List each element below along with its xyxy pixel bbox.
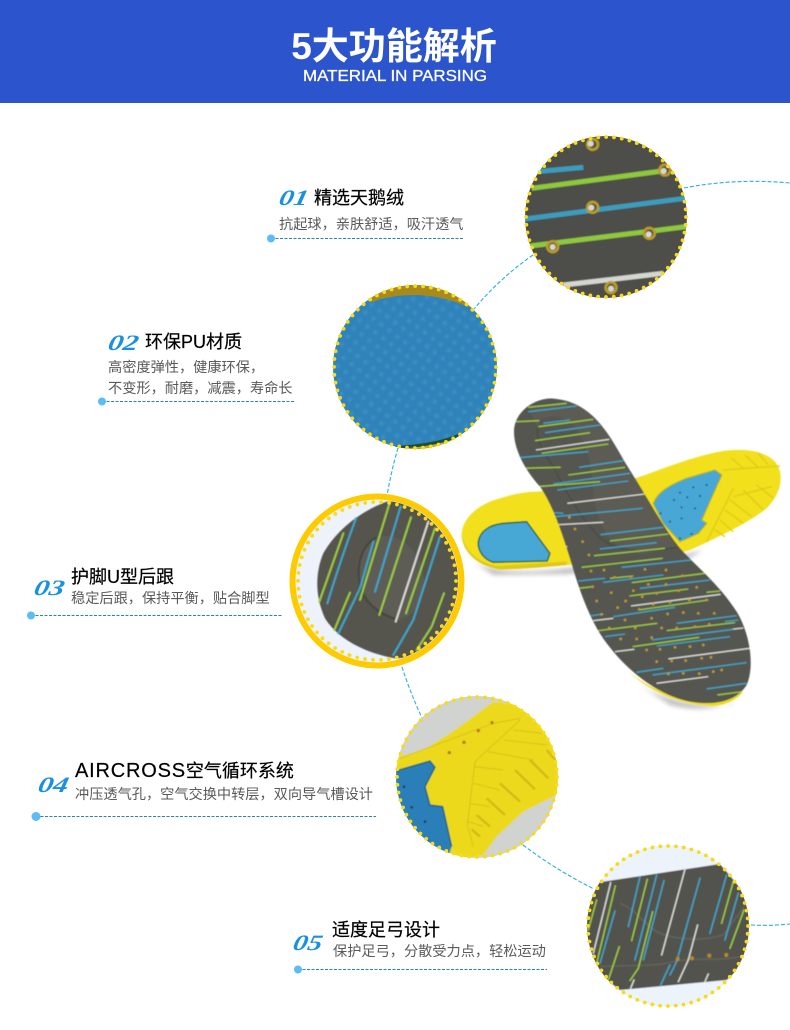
- shadows: [473, 550, 743, 709]
- circle 04: air channel close-up: [395, 695, 559, 859]
- feature 05 text: [291, 920, 547, 974]
- feature 02 text: [98, 330, 295, 406]
- circle 03: U-shaped heel close-up: [292, 496, 467, 666]
- divider 02: [98, 398, 295, 406]
- heading 04: AIRCROSS空气循环系统: [75, 760, 294, 782]
- number 01: 01: [277, 185, 311, 210]
- title: 5大功能解析: [291, 26, 497, 67]
- heading 01: 精选天鹅绒: [314, 188, 404, 208]
- circle 05: arch close-up: [586, 844, 750, 1008]
- heading 05: 适度足弓设计: [332, 920, 440, 940]
- circle 01: fabric close-up: [520, 133, 693, 303]
- heading 02: 环保PU材质: [145, 332, 242, 352]
- feature 04 text: [32, 760, 376, 821]
- heading 03: 护脚U型后跟: [71, 567, 174, 587]
- yellow insole: [462, 450, 781, 569]
- subtitle: MATERIAL IN PARSING: [303, 68, 487, 85]
- blue heel pad: [478, 522, 550, 562]
- number 02: 02: [106, 330, 141, 355]
- description 04: 冲压透气孔，空气交换中转层，双向导气槽设计: [75, 786, 373, 803]
- number 05: 05: [291, 930, 325, 955]
- feature 03 text: [27, 567, 282, 620]
- header banner: [0, 0, 790, 103]
- description 01: 抗起球，亲肤舒适，吸汗透气: [279, 217, 463, 233]
- divider 04: [32, 812, 376, 821]
- insole pair photo: [462, 397, 781, 709]
- divider 01: [267, 234, 464, 242]
- gray insole: [510, 397, 757, 707]
- feature 01 text: [267, 185, 464, 242]
- dashed connectors between circles: [387, 181, 790, 925]
- number 03: 03: [32, 575, 67, 600]
- description 02 line 2: 不变形，耐磨，减震，寿命长: [108, 380, 292, 397]
- description 03: 稳定后跟，保持平衡，贴合脚型: [71, 591, 270, 607]
- description 02: 高密度弹性，健康环保，: [108, 359, 264, 376]
- divider 05: [294, 966, 547, 974]
- blue forefoot pad: [653, 470, 722, 542]
- number 04: 04: [36, 772, 71, 797]
- description 05: 保护足弓，分散受力点，轻松运动: [333, 944, 546, 960]
- divider 03: [27, 612, 282, 620]
- circle 02: blue PU close-up: [330, 280, 500, 455]
